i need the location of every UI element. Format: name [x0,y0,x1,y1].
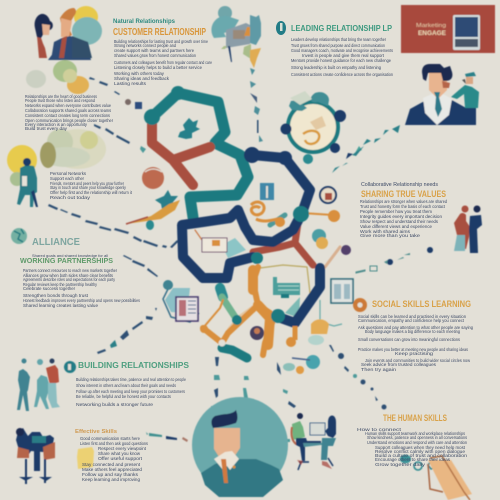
text block: left paragraph: People trust those who listen and respond [25,98,95,103]
text block: mid right: Trust and honesty form the basis of each contact [360,204,446,209]
figure: portrait in circle [192,397,288,497]
text block: the human skills: Resolve conflict calmly with open dialogue [375,449,465,454]
network: teal upper ring [152,93,320,358]
text block: the human skills: Human skills support teamwork and workplace relationships [365,431,466,436]
icon: person bust in orange hexagon [250,326,264,340]
text block: top paragraph: Sharing ideas and feedback [114,76,170,81]
text block: alliance section: Agreements describe roles and expectations for each party [23,277,116,282]
icon: sticky note [77,447,94,469]
text block: top paragraph: Customers and colleagues benefit from regular contact and care [114,60,212,65]
figure: hand with document [400,455,472,500]
text block: alliance section: Shared goals and shared knowledge for all [32,253,108,258]
text block: top right: Strong leadership is built on empathy and listening [291,65,381,70]
text block: building relationships: Networking builds a stronger future [76,402,153,407]
text block: mid right: Relationships are stronger when values are shared [360,199,447,204]
text block: the human skills: Show kindness, patience and openness in all conversations [367,435,468,440]
icon: green screen inside hexagon [273,277,300,298]
text block: social skills: Communication, empathy and confidence help you connect [358,318,465,323]
text block: person paragraph: Reach out today [50,195,91,200]
icon: hexagon inner emblem teal [178,118,200,139]
network: thin connector lines [195,213,340,330]
text block: top paragraph: Building relationships for lasting trust and growth over time [114,39,208,44]
text block: social skills: Practice makes you better at meeting new people and sharing ideas [358,347,469,352]
heading: alliance: ALLIANCE [32,237,80,248]
icon: leader badge [276,21,286,35]
text block: top title [113,18,206,38]
text block: the human skills: Grow together daily [375,462,426,467]
text block: alliance section: Partners connect resources to reach new markets together [23,268,117,273]
text block: person paragraph: Offer help first and the relationship will return it [50,190,133,195]
text block: left paragraph: Build trust every day [25,126,68,131]
text block: building relationships: Be reliable, be helpful and be honest with your contacts [76,394,172,399]
text block: alliance section: Regular reviews keep the partnership healthy [23,282,98,287]
text block: social skills: Small conversations can grow into meaningful connections [358,337,461,342]
text block: alliance section [20,253,141,308]
text block: mid right: Give more than you take [360,233,421,238]
text block: effective: Stay connected and present [82,462,141,467]
text block: social skills: Body language makes a big difference to each meeting [365,329,460,334]
text block: the human skills [357,413,468,467]
text block: top title: Natural Relationships [113,18,175,25]
icon: cloud above person [312,229,351,255]
text block: mid right [360,182,447,238]
dashed trail: upper right [332,125,400,173]
text block: left paragraph: Open communication brings people closer together [25,118,113,123]
text block: top right: Leaders develop relationships that bring the team together [291,37,386,42]
text block: top title: CUSTOMER RELATIONSHIP [113,27,206,38]
text block: social skills [358,299,473,372]
dashed trail: right edge of first panel [250,68,263,142]
text block: top paragraph: Strong networks connect people and [114,43,176,48]
text block: alliance section: Strengthen bonds through trust [23,293,89,298]
text block: mid right: Value different views and experience [360,224,432,229]
text block: effective: Make others feel appreciated [82,467,142,472]
text block: effective: Good communication starts here [80,436,140,441]
icon: document panel lower-right [320,279,367,326]
icon: alliance globe [11,228,27,244]
text block: mid right: Work with shared aims [360,229,411,234]
dashed trail: lower right [277,345,386,410]
text block: alliance section: Honest feedback improves every partnership and opens new possibilities [23,298,141,303]
text block: the human skills: Understand emotions and respond with care and attention [367,440,467,445]
text block: left paragraph: Every interaction is an opportunity [25,122,88,127]
dashed trail: lower left [48,204,178,277]
text block: person paragraph: Friends, mentors and peers help you grow further [50,181,124,186]
text block: top right [291,24,394,77]
figure: walking person with blobs [7,129,106,207]
text block: person paragraph: Personal Networks [50,171,87,176]
network: navy rings [182,155,310,278]
text block: top right: Invest in people and give them real support [302,53,385,58]
text block: alliance section: WORKING PARTNERSHIPS [20,258,113,265]
figure: businessman bust [405,64,475,125]
text block: top paragraph: Lasting results [114,81,147,86]
text block: social skills: Then try again [361,367,397,372]
text block: mid right: SHARING TRUE VALUES [361,189,446,199]
text block: left paragraph: Networks expand when everyone contributes value [25,103,111,108]
text block: social skills: SOCIAL SKILLS LEARNING [372,299,471,309]
text block: the human skills: Encourage others to share their ideas [375,457,451,462]
text block: top paragraph [114,39,212,86]
figure: couple top left [35,6,102,60]
text block: building relationships: Show interest in others and learn about their goals and needs [76,383,177,388]
text block: left paragraph [25,94,113,131]
text block: top right: Good managers coach, motivate and recognise achievements [291,48,394,53]
network nodes [144,86,340,346]
network: orange ring [203,267,273,355]
text block: alliance section: Alliances grow when both sides share clear benefits [23,273,114,278]
dashed trail: below network [211,357,249,413]
text block: person paragraph [50,171,133,200]
figure: three standing people [17,358,60,411]
figure: teal people top centre [211,6,261,68]
dashed trail: middle left [94,124,146,153]
figure: two people at laptop [292,413,336,470]
network: red links [152,123,210,185]
text block: left paragraph: Relationships are the heart of good business [25,94,98,99]
text block: top paragraph: Listening closely helps to build a better service [114,65,202,70]
text block: the human skills: How to connect [357,427,402,432]
text block: effective: Listen first and then ask good questions [80,441,149,446]
icon: red orb and splash left [126,167,180,230]
text block: top right: Consistent actions create confidence across the organisation [291,72,393,77]
text block: person paragraph: Support each other [50,176,84,181]
figure: teal person [451,72,479,125]
dashed trail: to portrait [146,432,290,442]
icon: gear circle upper right [280,91,346,164]
figure: meeting people [16,428,55,484]
text block: effective: Share what you know [98,451,141,456]
text block: building relationships: Building relationships takes time, patience and real attention to people [76,377,186,382]
text block: left paragraph: Consistent contact creates long term connections [25,113,111,118]
text block: effective: Offer useful support [98,456,143,461]
text block: social skills: Social skills can be learned and practised in every situation [358,314,466,319]
text block: left paragraph: Collaboration supports shared goals across teams [25,108,112,113]
text block: mid right: Show respect and understand their needs [360,219,439,224]
icon: centre blue document and orange swirl [251,183,278,221]
text block: alliance section: Shared learning creates lasting value [23,303,98,308]
text block: mid right: People remember how you treat them [360,209,432,214]
text block: the human skills: Support colleagues when they need help most [375,445,466,450]
text block: effective: Effective Skills [75,429,117,435]
icon: connect badge [64,361,76,373]
panel: red laptop card [401,5,495,53]
text block: person paragraph: Stay in touch and share your knowledge openly [50,185,127,190]
text block: top paragraph: create support with teams and partners here [114,48,194,53]
icons: soft blobs top left [26,60,89,94]
text block: social skills: Seek advice from trusted colleagues [361,362,437,367]
dashed trail: lower centre-left [97,308,157,354]
icon: cluster below network [283,319,329,374]
dashed trail: upper left [89,77,142,109]
text block: top paragraph: Shared values grow from honest communication [114,53,196,58]
dashed trail: mid right [356,247,433,273]
icon: bulb ring right of hexagon [320,187,336,203]
text block: alliance section: Celebrate success together [23,286,75,291]
text block: the human skills: THE HUMAN SKILLS [383,413,447,423]
text block: mid right: Integrity guides every important decision [360,214,442,219]
panel: red laptop card: ENGAGE [418,31,446,37]
text block: social skills: Keep practising [395,351,434,356]
text block: effective [75,429,149,482]
text block: building relationships: Follow up after each meeting and keep your promises to customers [76,389,186,394]
text block: top right: Trust grows from shared purpose and direct communication [291,43,385,48]
text block: top right: LEADING RELATIONSHIP LP [291,24,393,33]
icon: document above lower ring [202,238,227,252]
panel: red laptop card: Marketing [416,23,446,29]
text block: top paragraph: Working with others today [114,71,165,76]
text block: effective: Keep learning and improving [82,477,140,482]
text block: mid right: Collaborative Relationship needs [361,182,439,188]
figure: embrace couple right [454,206,482,253]
text block: the human skills: Build a culture of trust and collaboration [375,453,467,458]
text block: social skills: Join events and communities to build wider social circles now [365,358,471,363]
text block: building relationships [76,361,190,407]
text block: effective: Respect every viewpoint [98,446,147,451]
text block: social skills: Ask questions and pay attention to what other people are saying [358,325,473,330]
network: green and teal links [220,288,223,297]
text block: building relationships: BUILDING RELATIONSHIPS [78,361,190,370]
text block: top right: Mentors provide honest guidance for each new challenge [291,58,391,63]
icon: monitor lower-left node [163,280,199,322]
text block: effective: Follow up and say thanks [82,472,139,477]
